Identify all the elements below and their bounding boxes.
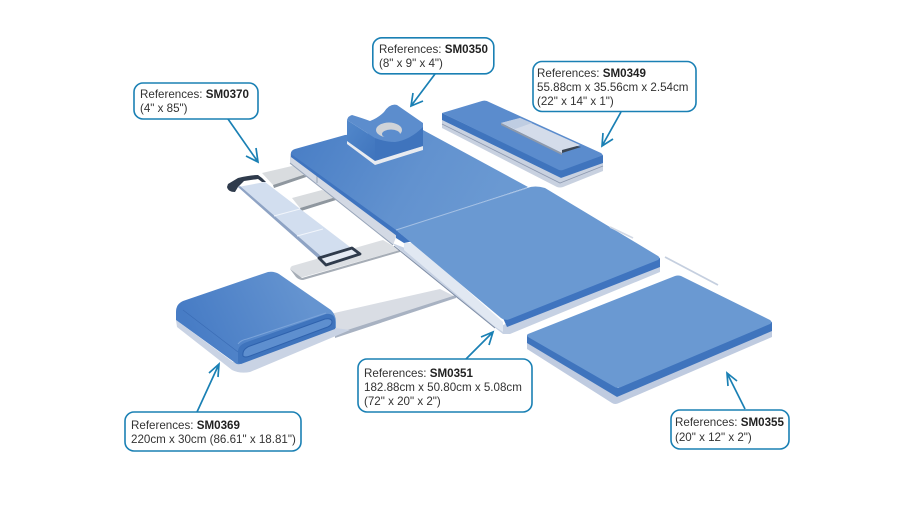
callout: SM0370: References: SM0370 [140,88,249,101]
mat SM0349 with metal strip [442,101,603,188]
main mat SM0351 foot section [392,186,660,334]
strap: SM0370 with cross bands [227,166,400,280]
callout: SM0349: 55.88cm x 35.56cm x 2.54cm [537,81,688,94]
callout: SM0369: References: SM0369 [131,419,240,432]
callout: SM0369 [125,364,301,451]
callout: SM0370 [134,83,258,162]
callout: SM0355: References: SM0355 [675,416,784,429]
mat SM0355 [527,276,772,404]
callout: SM0351 [358,332,532,412]
callout: SM0349: (22" x 14" x 1") [537,95,614,108]
callout: SM0351: (72" x 20" x 2") [364,395,441,408]
head block SM0350 [347,105,423,165]
arrow: SM0349 [602,112,621,146]
arrow: SM0355 [727,373,745,409]
callout: SM0369: 220cm x 30cm (86.61" x 18.81") [131,433,296,446]
arrow: SM0350 [411,74,435,106]
roll pad SM0369 [176,272,350,373]
thin rods [610,227,718,285]
callout: SM0350 [373,38,494,106]
arrow: SM0369 [197,364,219,412]
callout: SM0351: References: SM0351 [364,367,473,380]
callout: SM0350: References: SM0350 [379,43,488,56]
callout: SM0350: (8" x 9" x 4") [379,57,443,70]
callout: SM0351: 182.88cm x 50.80cm x 5.08cm [364,381,522,394]
arrow: SM0351 [466,332,493,359]
callout: SM0355: (20" x 12" x 2") [675,431,752,444]
callout: SM0349: References: SM0349 [537,67,646,80]
arrow: SM0370 [228,119,258,162]
folded strap to roll [330,289,456,338]
callout: SM0370: (4" x 85") [140,102,188,115]
main mat SM0351 head section [290,130,528,245]
callout: SM0349 [533,62,696,146]
callout: SM0355 [671,373,789,449]
